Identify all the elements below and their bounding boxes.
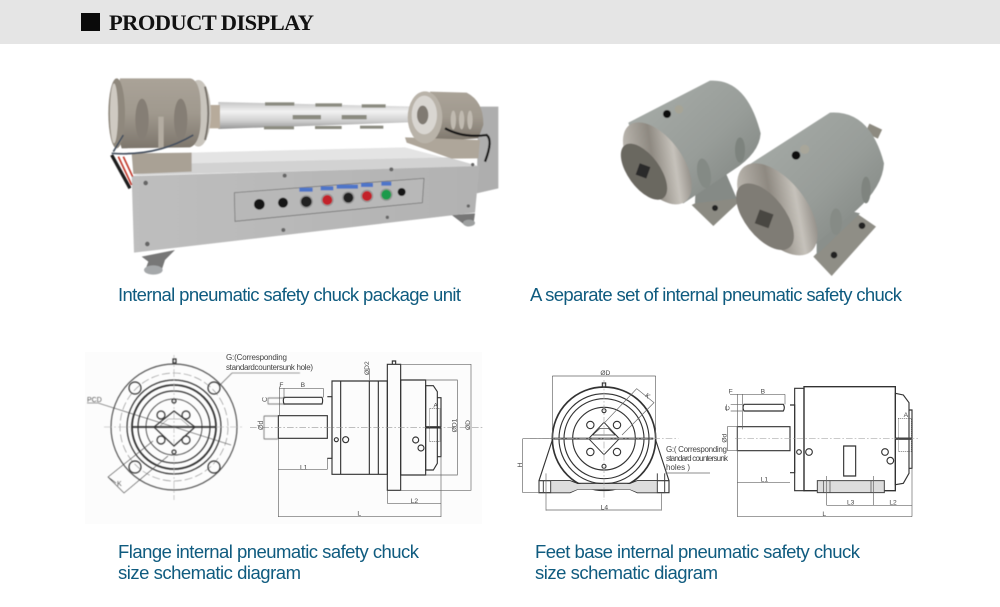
side dimension labels: ØD2 [364, 361, 371, 375]
control plate [234, 178, 424, 221]
base [692, 187, 739, 226]
drawing background [85, 352, 482, 524]
drawing: feet side view [722, 387, 920, 518]
pedestal rib [817, 210, 860, 255]
right chuck body [430, 92, 483, 142]
side dimension labels: F [729, 389, 733, 396]
side dimension labels: A [433, 403, 438, 410]
caption: separate set: A separate set of internal pneumatic safety chuck [530, 284, 903, 305]
front dimension labels: L4 [601, 504, 608, 511]
side dimension labels: L3 [847, 500, 855, 507]
rod [218, 102, 418, 129]
caption: feet diagram: size schematic diagram [535, 562, 718, 583]
bolt [792, 151, 800, 160]
header band [0, 0, 1000, 44]
right pedestal [405, 137, 480, 159]
face ring [721, 149, 833, 270]
right foot [452, 213, 475, 226]
rear cabinet [477, 107, 498, 193]
side dimension labels: B [301, 382, 306, 389]
label: K: K [117, 481, 122, 488]
side dimension labels: L1 [761, 476, 768, 483]
side dimension labels: L1 [300, 464, 308, 471]
drawing: feet front view [517, 370, 710, 511]
note: flange G: G:(Corresponding [226, 353, 287, 362]
screws [143, 163, 474, 246]
blue labels [299, 188, 313, 192]
flange shaft labels: C [262, 397, 269, 402]
left pedestal [132, 153, 192, 174]
body [628, 81, 761, 203]
buttons [254, 199, 265, 210]
side dimension labels: L [357, 511, 361, 518]
flange shaft stub [264, 398, 285, 439]
side dimension labels: ØD [465, 420, 472, 430]
flange shaft labels: Ød [258, 421, 265, 430]
bench front panel [132, 166, 479, 253]
caption: flange diagram: size schematic diagram [118, 562, 301, 583]
left chuck body [116, 78, 201, 148]
body [743, 113, 884, 252]
stud [865, 124, 882, 139]
front dimension labels [517, 370, 652, 511]
caption: flange diagram: Flange internal pneumatic safety chuck [118, 541, 420, 562]
note: feet G: G:( Corresponding [666, 445, 727, 454]
side dimension labels: F [279, 382, 283, 389]
right cable [445, 128, 490, 162]
left chuck [609, 81, 761, 226]
face ring [609, 110, 705, 216]
side dimension labels: L2 [411, 498, 418, 505]
side dimension labels: ØD1 [452, 418, 459, 432]
pedestal rib [695, 160, 737, 203]
right chuck [721, 113, 884, 276]
note: feet G: holes ) [666, 463, 690, 472]
side dimension labels [722, 389, 909, 518]
side dimension labels [279, 361, 472, 518]
front dimension labels: K [643, 392, 652, 401]
bolt [663, 110, 671, 118]
drawing: flange side view [250, 361, 483, 518]
left cables [112, 155, 130, 188]
note: flange G: standardcountersunk hole) [226, 363, 313, 372]
caption: package unit: Internal pneumatic safety chuck package unit [118, 284, 461, 305]
caption: feet diagram: Feet base internal pneumatic safety chuck [535, 541, 861, 562]
header marker square [81, 13, 100, 31]
note: feet G: standard countersunk [666, 454, 729, 463]
left foot [142, 250, 175, 274]
left flange [186, 80, 211, 147]
side dimension labels: B [761, 389, 766, 396]
front dimension labels: H [517, 462, 524, 467]
drawing: flange front view [87, 355, 300, 500]
bench top [133, 147, 478, 175]
side dimension labels: L [822, 511, 826, 518]
title: PRODUCT DISPLAY [109, 10, 314, 35]
side dimension labels: Ød [722, 433, 729, 443]
front dimension labels: ØD [600, 370, 611, 377]
photo: separate chuck set [609, 81, 884, 276]
side dimension labels: A [904, 412, 909, 419]
flange shaft labels [258, 397, 269, 430]
left shaft collar [203, 105, 220, 128]
label: PCD: PCD [87, 397, 102, 404]
side dimension labels: C [724, 406, 731, 411]
photo: chuck package unit [108, 78, 498, 275]
right chuck face [408, 91, 442, 143]
side dimension labels: L2 [889, 500, 897, 507]
base [813, 213, 876, 276]
